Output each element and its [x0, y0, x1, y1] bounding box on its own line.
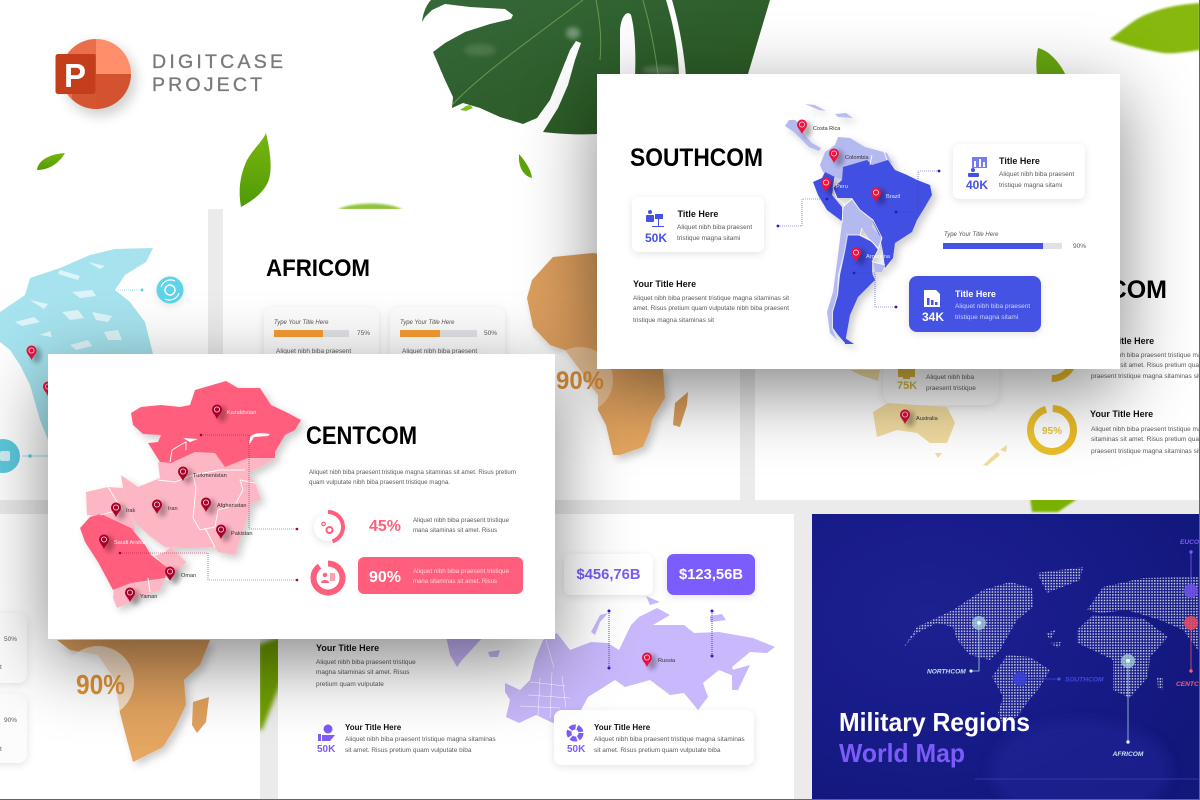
text block: your title here — [316, 643, 416, 688]
progress bar: 90 percent — [943, 232, 1086, 250]
card: clipped 90 percent: 90% — [4, 717, 17, 724]
card: aperture 50K: sit amet. Risus pretium quam vulputate biba — [594, 747, 721, 754]
shadow: southcom slide — [597, 74, 1120, 369]
map pin: australia — [900, 410, 915, 427]
card: 75K: Aliquet nibh biba — [926, 374, 974, 381]
map label: russia: Russia — [658, 658, 676, 664]
chart: 45 percent donut — [313, 512, 343, 542]
marker: eucom — [1180, 539, 1200, 598]
connector: argentina to 34K card — [853, 272, 897, 308]
heading: centcom: CENTCOM — [306, 422, 417, 450]
card: 90 percent: Aliquet nibh biba praesent tristique — [413, 568, 509, 575]
brand name — [152, 51, 283, 96]
card: 456,76B — [564, 554, 653, 595]
card: 50K — [632, 197, 764, 252]
card: aperture 50K: Your Title Here — [594, 723, 651, 732]
leaf: center — [240, 133, 271, 207]
card: progress 50 percent: Type Your Title Here — [400, 320, 455, 326]
marker: africom: AFRICOM — [1112, 751, 1144, 758]
connector: kazakhstan to 45 percent — [200, 434, 298, 530]
connector: peru to 50K card — [777, 198, 828, 227]
panel: northcom slide — [0, 209, 208, 500]
text block: bottom left: Your Title Here — [345, 723, 402, 732]
callout: 90 percent circle lower: 90% — [76, 669, 125, 700]
text block: your title here: Your Title Here — [633, 279, 696, 289]
text block: your title here: Aliquet nibh biba praesent tristique — [316, 659, 416, 666]
chart: 95 percent donut: 95% — [1042, 426, 1062, 437]
panel: africom slide — [223, 209, 740, 500]
callout icon: cyan clover — [0, 439, 48, 473]
card: 34K: Aliquet nibh biba praesent — [955, 303, 1030, 310]
text block: your title here: Your Title Here — [316, 643, 379, 653]
icon: document chart — [924, 290, 940, 307]
brand name: DIGITCASE — [152, 51, 283, 73]
stat: hand icon 50K — [317, 724, 336, 755]
card: aperture 50K: 50K — [567, 744, 586, 755]
text block: 45 percent description — [413, 517, 509, 534]
card: 50K: 50K — [645, 231, 667, 245]
map: africa upper — [527, 253, 665, 455]
card: 50K: Title Here — [678, 209, 718, 219]
map: south america — [785, 104, 932, 344]
text block: second title: Your Title Here — [1090, 409, 1153, 419]
slide: southcom — [597, 74, 1120, 369]
card: clipped 90 percent — [0, 694, 27, 763]
map pin: russia — [642, 652, 657, 670]
heading: africom: AFRICOM — [266, 255, 370, 282]
card: 50K: Aliquet nibh biba praesent — [677, 224, 752, 231]
powerpoint logo — [56, 39, 136, 116]
marker: africom — [1112, 654, 1144, 758]
callout icon: cyan globe — [118, 276, 184, 304]
map labels: central asia: Pakistan — [231, 531, 252, 537]
progress bar: 90 percent: Type Your Title Here — [944, 232, 999, 238]
shadow: centcom slide — [48, 354, 555, 639]
card: aperture 50K: Aliquet nibh biba praesent tristique magna sitaminas — [594, 736, 745, 743]
map: canada and north america — [0, 248, 153, 440]
card: 34K: Title Here — [955, 289, 996, 299]
card: 456,76B: $456,76B — [576, 566, 641, 583]
map: australia — [850, 370, 1007, 466]
map: africa lower — [57, 640, 210, 762]
card: progress 50 percent: 50% — [484, 330, 497, 337]
text block: your title here: tristique magna sitaminas sit — [633, 317, 714, 324]
text block: bottom left — [345, 723, 496, 754]
card: progress 50 percent: Aliquet nibh biba praesent — [402, 348, 477, 355]
icon: person with flag — [646, 210, 664, 227]
text block: first title: Your Title Here — [1091, 336, 1154, 346]
card: 90 percent: mana sitaminas sit amet. Risus — [413, 578, 498, 585]
decorative leaf behind panels: bottom green strip — [258, 204, 1080, 730]
card: progress 75 percent: Type Your Title Here — [274, 320, 329, 326]
text block: first title — [1091, 336, 1200, 380]
map pin: north america — [26, 346, 42, 363]
chart: 95 percent donut — [1030, 408, 1074, 452]
map: madagascar — [673, 392, 688, 427]
card: 75K: praesent tristique — [926, 385, 976, 392]
text block: 45 percent description: Aliquet nibh biba praesent tristique — [413, 517, 509, 524]
brand name: PROJECT — [152, 74, 262, 96]
marker: southcom — [1013, 672, 1104, 686]
map labels: south america — [813, 126, 900, 260]
leaf: behind southcom — [1036, 48, 1066, 76]
card: progress 75 percent: 75% — [357, 330, 370, 337]
panel: russia slide — [278, 514, 794, 800]
card: 40K: Aliquet nibh biba praesent — [999, 171, 1074, 178]
connector: brazil to 40K card — [895, 170, 940, 213]
marker: centcom — [1176, 616, 1200, 688]
text block: your title here — [633, 279, 789, 324]
marker: northcom: NORTHCOM — [927, 668, 966, 676]
card: 90 percent — [358, 557, 523, 594]
chart: first gold donut — [1030, 336, 1074, 378]
map labels: central asia: Turkmenistan — [193, 473, 227, 479]
heading: military regions world map: World Map — [839, 738, 965, 768]
card: progress 75 percent: Aliquet nibh biba praesent — [276, 348, 351, 355]
card: 34K: tristique magna sitami — [955, 314, 1018, 321]
callout: 90 percent circle lower — [62, 646, 134, 718]
map labels: central asia: Yaman — [140, 594, 157, 600]
map: madagascar lower — [192, 697, 209, 733]
panel: navy world map slide — [812, 514, 1200, 800]
map borders: south america — [833, 152, 887, 265]
card: 90 percent: 90% — [369, 569, 401, 586]
map pins: central asia — [99, 404, 231, 605]
chart: 90 percent donut — [314, 564, 342, 592]
map pins: south america — [797, 120, 886, 265]
stat: 45 percent: 45% — [369, 518, 401, 535]
map labels: central asia: Saudi Arabia — [114, 540, 147, 546]
map: central asia — [80, 381, 301, 608]
card: progress 75 percent — [264, 307, 379, 377]
card: 123,56B — [667, 554, 755, 595]
map labels: south america: Costa Rica — [813, 126, 841, 132]
connector: right dotted line — [710, 610, 714, 658]
stat: hand icon 50K: 50K — [317, 744, 336, 755]
card: clipped 90 percent: t — [0, 746, 2, 753]
map labels: south america: Colombia — [845, 155, 870, 161]
leaf: monstera — [422, 0, 770, 134]
icon: gears — [322, 522, 332, 533]
card: 75K — [883, 340, 999, 405]
heading: southcom: SOUTHCOM — [630, 144, 763, 172]
text block: bottom left: Aliquet nibh biba praesent tristique magna sitaminas — [345, 736, 496, 743]
leaf: small right — [519, 154, 532, 178]
leaf: small left — [37, 153, 65, 170]
card: clipped 50 percent: 50% — [4, 636, 17, 643]
leaf: top right blurred — [1110, 3, 1200, 53]
card: 40K: tristique magna sitami — [999, 182, 1062, 189]
card: 75K: 75K — [897, 380, 917, 392]
connector: left dotted line — [608, 610, 610, 670]
heading: military regions world map: Military Regions — [839, 707, 1030, 737]
map labels: central asia — [114, 410, 256, 600]
card: 34K: 34K — [922, 310, 944, 324]
card: 40K — [953, 144, 1085, 199]
card: clipped 50 percent — [0, 613, 27, 683]
map labels: central asia: Irak — [126, 508, 136, 514]
progress bar: 90 percent: 90% — [1073, 243, 1086, 250]
text block: bottom left: sit amet. Risus pretium quam vulputate biba — [345, 747, 472, 754]
card: progress 50 percent — [390, 307, 505, 377]
map pin: partial — [43, 382, 58, 399]
map labels: south america: Argentina — [866, 254, 891, 260]
logo letter: P — [64, 57, 86, 94]
text block: 45 percent description: mana sitaminas sit amet. Risus — [413, 527, 498, 534]
map: dotted world — [903, 567, 1200, 723]
map labels: central asia: Oman — [181, 573, 196, 579]
text block: your title here: amet. Risus pretium quam vulputate nibh biba praesent — [633, 305, 789, 312]
callout: 90 percent circle — [547, 347, 613, 413]
map: russia — [505, 596, 775, 723]
text block: your title here: Aliquet nibh biba praesent tristique magna sitaminas sit — [633, 295, 789, 302]
marker: northcom — [927, 616, 986, 676]
text block: centcom intro — [309, 469, 516, 486]
text block: your title here: magna sitaminas sit amet. Risus — [316, 669, 410, 676]
connector: saudi arabia to 90 percent — [119, 552, 298, 581]
map labels: central asia: Kazakhstan — [227, 410, 256, 416]
card: clipped 50 percent: t — [0, 664, 2, 671]
heading: com: PACOM — [1076, 276, 1167, 304]
card: aperture 50K — [554, 710, 754, 765]
marker: southcom: SOUTHCOM — [1065, 676, 1104, 684]
map labels: south america: Peru — [836, 184, 848, 190]
map label: australia: Australia — [916, 416, 939, 422]
card: 34K — [909, 276, 1041, 332]
text block: centcom intro: Aliquet nibh biba praesent tristique magna sitaminas sit amet. Risus pretium — [309, 469, 516, 476]
card: 50K: tristique magna sitami — [677, 235, 740, 242]
card: 123,56B: $123,56B — [679, 566, 743, 583]
text block: second title — [1090, 409, 1200, 455]
map borders: europe — [520, 640, 570, 718]
card: 40K: Title Here — [999, 156, 1040, 166]
map borders — [100, 442, 255, 592]
heading: military regions world map — [839, 707, 1030, 768]
panel: lower left africa slide — [0, 514, 260, 800]
card: 40K: 40K — [966, 178, 988, 192]
icon: person and chart — [321, 573, 335, 583]
callout: 90 percent circle: 90% — [556, 367, 604, 395]
slide: centcom — [48, 354, 555, 639]
text block: your title here: pretium quam vulputate — [316, 681, 384, 688]
map labels: central asia: Iran — [168, 506, 178, 512]
map labels: south america: Brazil — [886, 194, 900, 200]
text block: centcom intro: quam vulputate nibh biba praesent tristique magna. — [309, 479, 450, 486]
map: greenland fragment — [446, 636, 500, 667]
panel: pacific slide — [755, 209, 1200, 500]
icon: presenter with chart — [968, 157, 987, 177]
map labels: central asia: Afghanistan — [217, 503, 247, 509]
